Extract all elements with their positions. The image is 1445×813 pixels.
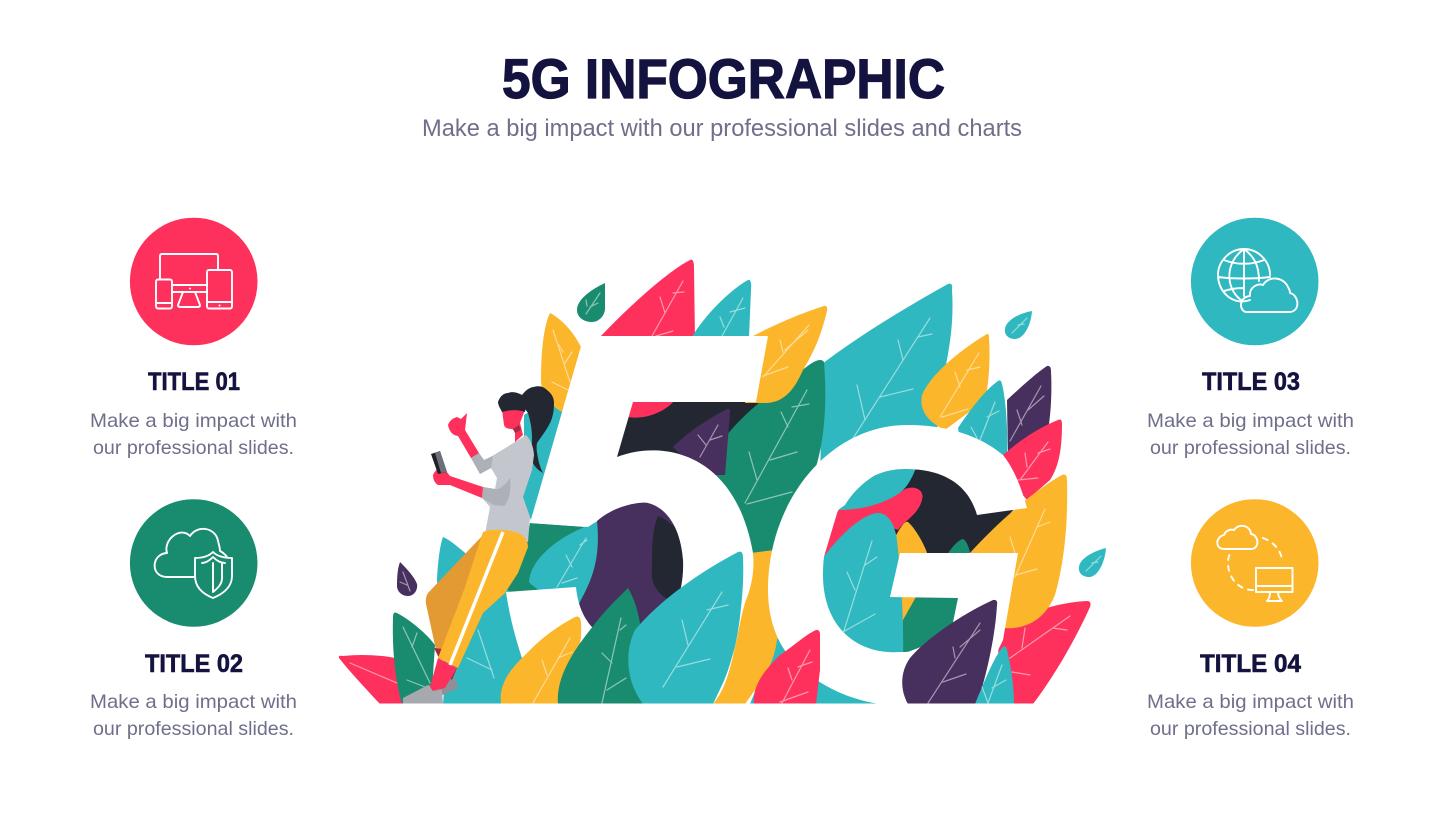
heading: title 02: TITLE 02 — [145, 650, 243, 678]
phone arm — [433, 467, 483, 498]
leaf: purple foreground — [902, 600, 997, 704]
leaf: small teal right — [1079, 548, 1106, 577]
background fill: purple blob — [579, 502, 675, 628]
leaf: pink top — [600, 260, 695, 340]
thumbs-up arm — [448, 413, 479, 458]
text: description 03 — [1147, 410, 1354, 459]
text: description 03: our professional slides. — [1150, 437, 1351, 459]
icon: cloud sync monitor — [1191, 499, 1318, 627]
leaf: teal right — [958, 380, 1008, 456]
leaf: small yellow inside G — [895, 522, 928, 625]
leaf: green bottom left — [393, 612, 435, 704]
text: description 02: our professional slides. — [93, 718, 294, 740]
panel: title 04 — [1147, 499, 1354, 740]
face and neck — [502, 410, 525, 442]
leaf: small teal top right — [1005, 311, 1032, 339]
leaf: purple behind 5 — [673, 409, 730, 475]
phone — [431, 451, 447, 474]
text: description 01: Make a big impact with — [90, 410, 297, 432]
text: description 02 — [90, 691, 297, 740]
text: description 01: our professional slides. — [93, 437, 294, 459]
background fill: dark behind 5 — [617, 402, 759, 457]
front shoe — [403, 685, 443, 704]
icon: cloud shield — [130, 499, 258, 627]
hair bun — [498, 392, 526, 412]
numeral: white G — [768, 425, 1027, 704]
background fill: teal under G — [750, 638, 876, 704]
background fill: dark under G — [885, 698, 925, 704]
background fill: yellow between 5 and G — [714, 550, 778, 704]
foot — [430, 658, 457, 691]
shirt — [471, 435, 534, 542]
leaf: green tip inside G — [948, 539, 970, 553]
background fill: dark behind G — [894, 469, 1014, 553]
icon: devices — [130, 218, 258, 345]
panel: title 03 — [1147, 218, 1354, 459]
leaf: big teal — [820, 284, 952, 462]
leaf: yellow top left — [541, 313, 581, 412]
text: description 03: Make a big impact with — [1147, 410, 1354, 432]
background fill: dark in purple blob — [652, 516, 686, 600]
leaf: teal top — [692, 280, 751, 337]
leaf: small green floating — [577, 283, 605, 322]
leaf: small purple floating — [397, 562, 417, 596]
leaf: teal foreground small — [975, 646, 1014, 704]
leaf: big teal foreground — [628, 552, 743, 704]
second shoe — [438, 677, 458, 695]
background fill: green under 5 — [507, 523, 585, 592]
leaf: teal strip behind woman — [521, 405, 564, 520]
panel: title 01 — [90, 218, 297, 459]
leaf: yellow right upper — [921, 334, 990, 430]
text: description 04: Make a big impact with — [1147, 691, 1354, 713]
heading: title 03: TITLE 03 — [1202, 368, 1300, 396]
text: description 04 — [1147, 691, 1354, 740]
hair ponytail — [522, 386, 554, 473]
leaf: big yellow right — [968, 475, 1091, 704]
infographic canvas — [92, 58, 1353, 739]
background fill: green under G bar — [902, 597, 958, 652]
text: description 02: Make a big impact with — [90, 691, 297, 713]
background fill: teal cap — [838, 469, 916, 510]
background fill: pink cap — [628, 402, 674, 418]
figure: woman with phone — [403, 386, 554, 704]
sleeve shade — [471, 453, 510, 506]
text: description 01 — [90, 410, 297, 459]
background fill: pink blob — [824, 488, 922, 556]
leaf: pink bottom left — [339, 655, 405, 704]
leaf: green foreground — [558, 588, 650, 704]
leaf: big green — [716, 360, 826, 553]
ankle — [434, 648, 457, 680]
numeral: white 5 — [506, 336, 768, 704]
panel: title 02 — [90, 499, 297, 740]
leaf: pink right — [1003, 420, 1062, 500]
heading: title 01: TITLE 01 — [148, 368, 240, 396]
front leg — [438, 530, 528, 668]
back leg — [426, 534, 487, 650]
leaf: pink foreground — [754, 630, 820, 704]
neck shadow — [513, 425, 521, 433]
leaf: yellow top right — [745, 306, 827, 403]
leaf: teal inside G — [823, 513, 904, 652]
icon: globe cloud — [1191, 218, 1318, 345]
leaf: teal on green — [529, 522, 598, 604]
illustration: 5G with leaves — [339, 260, 1106, 704]
leaf: purple right — [1007, 366, 1051, 460]
title: 5G INFOGRAPHIC — [502, 47, 945, 110]
leg stripe — [450, 532, 503, 665]
leaf: teal behind woman legs — [437, 537, 530, 704]
heading: title 04: TITLE 04 — [1200, 650, 1301, 678]
leaf: yellow foreground — [501, 617, 581, 704]
text: description 04: our professional slides. — [1150, 718, 1351, 740]
subtitle: Make a big impact with our professional slides and charts — [422, 115, 1022, 142]
